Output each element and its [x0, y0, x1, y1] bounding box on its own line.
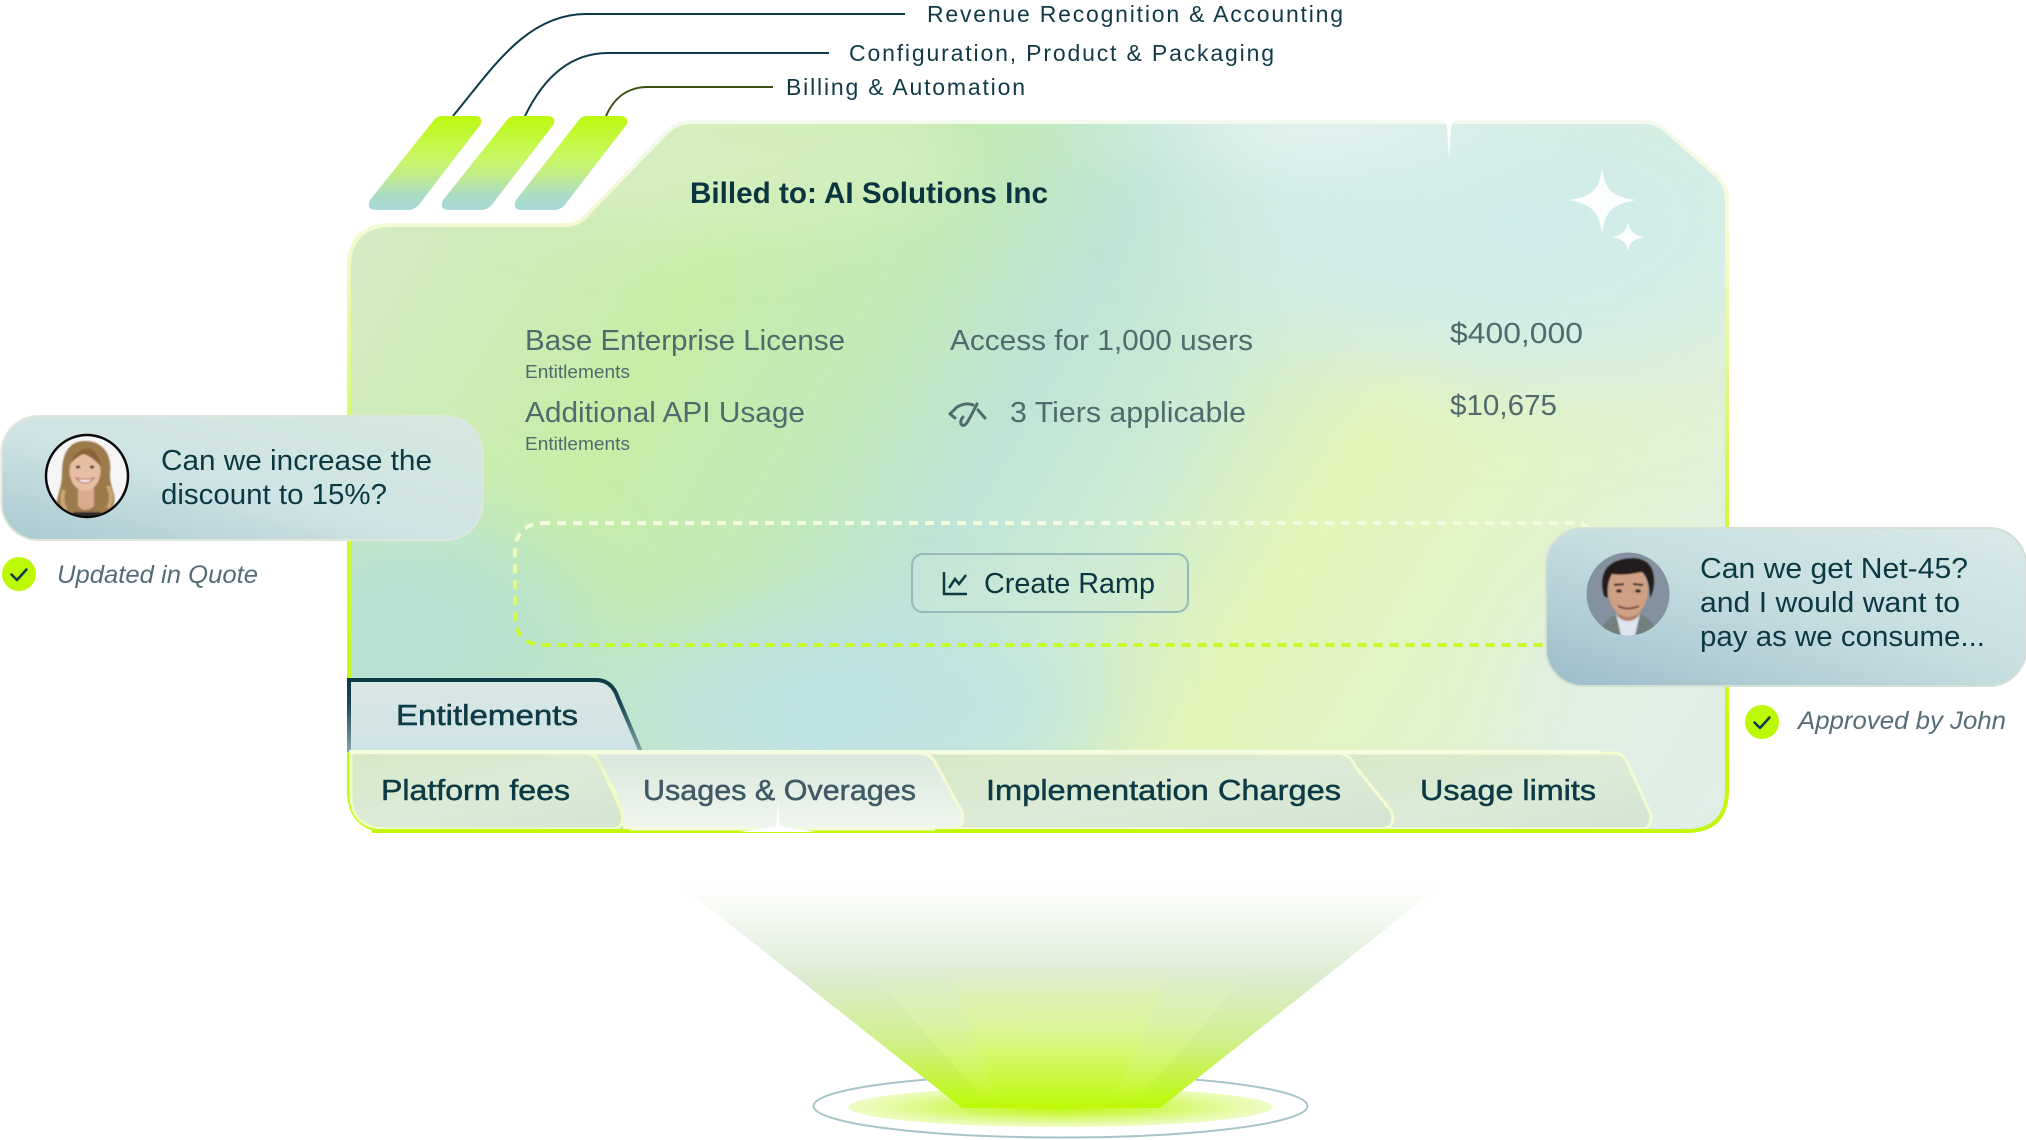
connector lines and labels — [453, 1, 1343, 116]
panel outline — [349, 122, 1727, 831]
line item: base enterprise license: Access for 1,000 users — [950, 325, 1253, 357]
tab: entitlements: Entitlements — [396, 700, 578, 732]
panel background — [351, 124, 1725, 829]
chat bubble: net-45 request: Can we get Net-45? — [1700, 553, 1968, 585]
sparkle icon — [1568, 168, 1645, 251]
lime bottom edge — [372, 829, 1690, 833]
tab: platform fees — [351, 753, 623, 829]
title: billed to: Billed to: AI Solutions Inc — [690, 177, 1048, 210]
status: updated in quote — [2, 557, 258, 591]
cream divider — [349, 750, 1600, 754]
tab row — [349, 752, 1690, 832]
projector base and light beam — [680, 885, 1441, 1138]
base ring — [814, 1074, 1308, 1138]
connector: billing: Billing & Automation — [786, 74, 1025, 100]
tab: usage limits: Usage limits — [1420, 775, 1596, 807]
button: create ramp: Create Ramp — [984, 568, 1155, 600]
chat bubble: discount request — [2, 416, 482, 540]
tab: usages and overages — [593, 753, 963, 832]
chat bubble: net-45 request: and I would want to — [1700, 587, 1960, 619]
connector: revenue recognition — [453, 1, 1343, 116]
status: updated in quote: Updated in Quote — [57, 561, 258, 589]
icon: gauge — [950, 404, 985, 425]
line item: additional API usage: Entitlements — [525, 434, 630, 454]
connector: configuration: Configuration, Product & Packaging — [849, 40, 1274, 66]
tab: entitlements — [349, 680, 641, 752]
status: approved by john: Approved by John — [1796, 707, 2006, 735]
line item: base enterprise license: Base Enterprise License — [525, 325, 845, 357]
status: approved by john — [1745, 705, 2006, 739]
line item: additional API usage — [525, 390, 1557, 454]
tab: implementation charges — [928, 753, 1393, 829]
top notch spike — [1436, 118, 1462, 160]
icon: line chart — [944, 572, 967, 594]
white gap along bottom edge — [629, 818, 935, 832]
line item: base enterprise license: $400,000 — [1450, 318, 1583, 350]
chat bubble: net-45 request: pay as we consume... — [1700, 621, 1985, 653]
icon: check — [1745, 705, 1779, 739]
panel: invoice card — [347, 120, 1729, 833]
connector: revenue recognition: Revenue Recognition & Accounting — [927, 1, 1343, 27]
line item: additional API usage: 3 Tiers applicable — [1010, 397, 1246, 429]
icon: three module stripes — [369, 116, 627, 210]
tab: usages and overages: Usages & Overages — [643, 775, 916, 807]
dashed ramp drop zone — [515, 523, 1600, 645]
chat bubble: discount request: discount to 15%? — [161, 479, 387, 511]
line item: additional API usage: $10,675 — [1450, 390, 1557, 422]
tab: usage limits — [1344, 753, 1651, 829]
connector: billing — [606, 74, 1025, 116]
chat bubble: net-45 request — [1546, 528, 2026, 686]
tab: platform fees: Platform fees — [381, 775, 570, 807]
chat bubble: discount request: Can we increase the — [161, 445, 432, 477]
base glow — [848, 1087, 1272, 1127]
tab: implementation charges: Implementation Charges — [986, 775, 1341, 807]
line item: additional API usage: Additional API Usage — [525, 397, 805, 429]
line item: base enterprise license: Entitlements — [525, 362, 630, 382]
avatar: woman — [46, 435, 128, 525]
line item: base enterprise license — [525, 318, 1583, 382]
icon: check — [2, 557, 36, 591]
avatar: man — [1586, 552, 1670, 640]
button: create ramp — [912, 554, 1188, 612]
connector: configuration — [525, 40, 1274, 116]
light beam — [680, 885, 1441, 1108]
